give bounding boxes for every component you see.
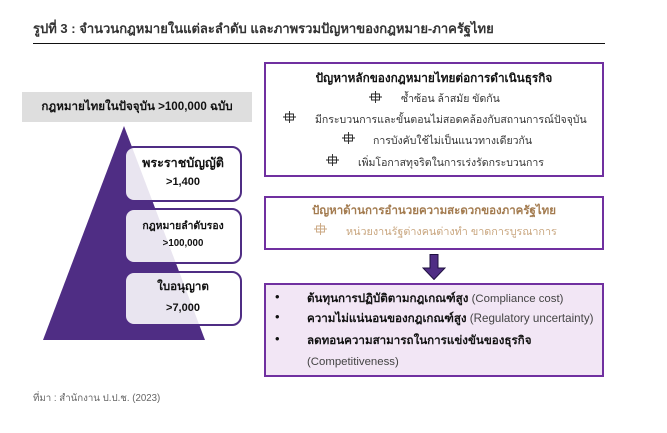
pyramid — [43, 126, 205, 340]
consequence 2: • — [275, 309, 280, 324]
tier box: subordinate laws — [124, 208, 242, 264]
panel: public sector facilitation problems — [264, 196, 604, 250]
tier box: licences: >7,000 — [166, 302, 200, 314]
tier box: royal decrees: พระราชบัญญัติ — [142, 156, 224, 170]
panel heading: ปัญหาหลักของกฎหมายไทยต่อการดำเนินธุรกิจ — [316, 71, 552, 85]
consequence 3: • — [275, 331, 280, 346]
consequence 3: (Competitiveness) — [307, 356, 399, 368]
heading bar: Thai laws today: กฎหมายไทยในปัจจุบัน >100,000 ฉบับ — [41, 100, 233, 113]
tier box: royal decrees — [124, 146, 242, 202]
panel: consequences — [264, 283, 604, 377]
problem item: หน่วยงานรัฐต่างคนต่างทำ ขาดการบูรณาการ — [346, 226, 557, 238]
title: รูปที่ 3 : จำนวนกฎหมายในแต่ละลำดับ และภาพรวมปัญหาของกฎหมาย-ภาครัฐไทย — [33, 21, 494, 36]
consequence 2: ความไม่แน่นอนของกฎเกณฑ์สูง (Regulatory uncertainty) — [307, 312, 594, 325]
panel heading: ปัญหาด้านการอำนวยความสะดวกของภาครัฐไทย — [312, 205, 556, 217]
panel: main problems of Thai law — [264, 62, 604, 177]
problem item 1 — [369, 91, 500, 105]
tier box: royal decrees: >1,400 — [166, 176, 200, 188]
tier box: licences — [124, 271, 242, 326]
consequence 3: ลดทอนความสามารถในการแข่งขันของธุรกิจ — [307, 334, 532, 347]
arrow: down — [422, 254, 446, 280]
tier box: licences: ใบอนุญาต — [157, 280, 209, 293]
problem item 4 — [326, 154, 544, 169]
problem item 2: มีกระบวนการและขั้นตอนไม่สอดคล้องกับสถานการณ์ปัจจุบัน — [315, 114, 587, 126]
tier box: subordinate laws: กฎหมายลำดับรอง — [142, 221, 224, 232]
consequence 1: • — [275, 289, 280, 304]
problem item — [314, 223, 557, 238]
problem item 1: ซ้ำซ้อน ล้าสมัย ขัดกัน — [401, 93, 500, 105]
problem item 3 — [342, 132, 532, 147]
heading bar: Thai laws today — [22, 92, 252, 122]
problem item 3: การบังคับใช้ไม่เป็นแนวทางเดียวกัน — [373, 135, 532, 147]
source note: ที่มา : สำนักงาน ป.ป.ช. (2023) — [33, 393, 160, 404]
consequence 1: ต้นทุนการปฏิบัติตามกฎเกณฑ์สูง (Compliance cost) — [307, 292, 563, 305]
consequence 3 — [275, 331, 532, 368]
problem item 4: เพิ่มโอกาสทุจริตในการเร่งรัดกระบวนการ — [358, 157, 544, 169]
tier box: subordinate laws: >100,000 — [163, 238, 203, 249]
